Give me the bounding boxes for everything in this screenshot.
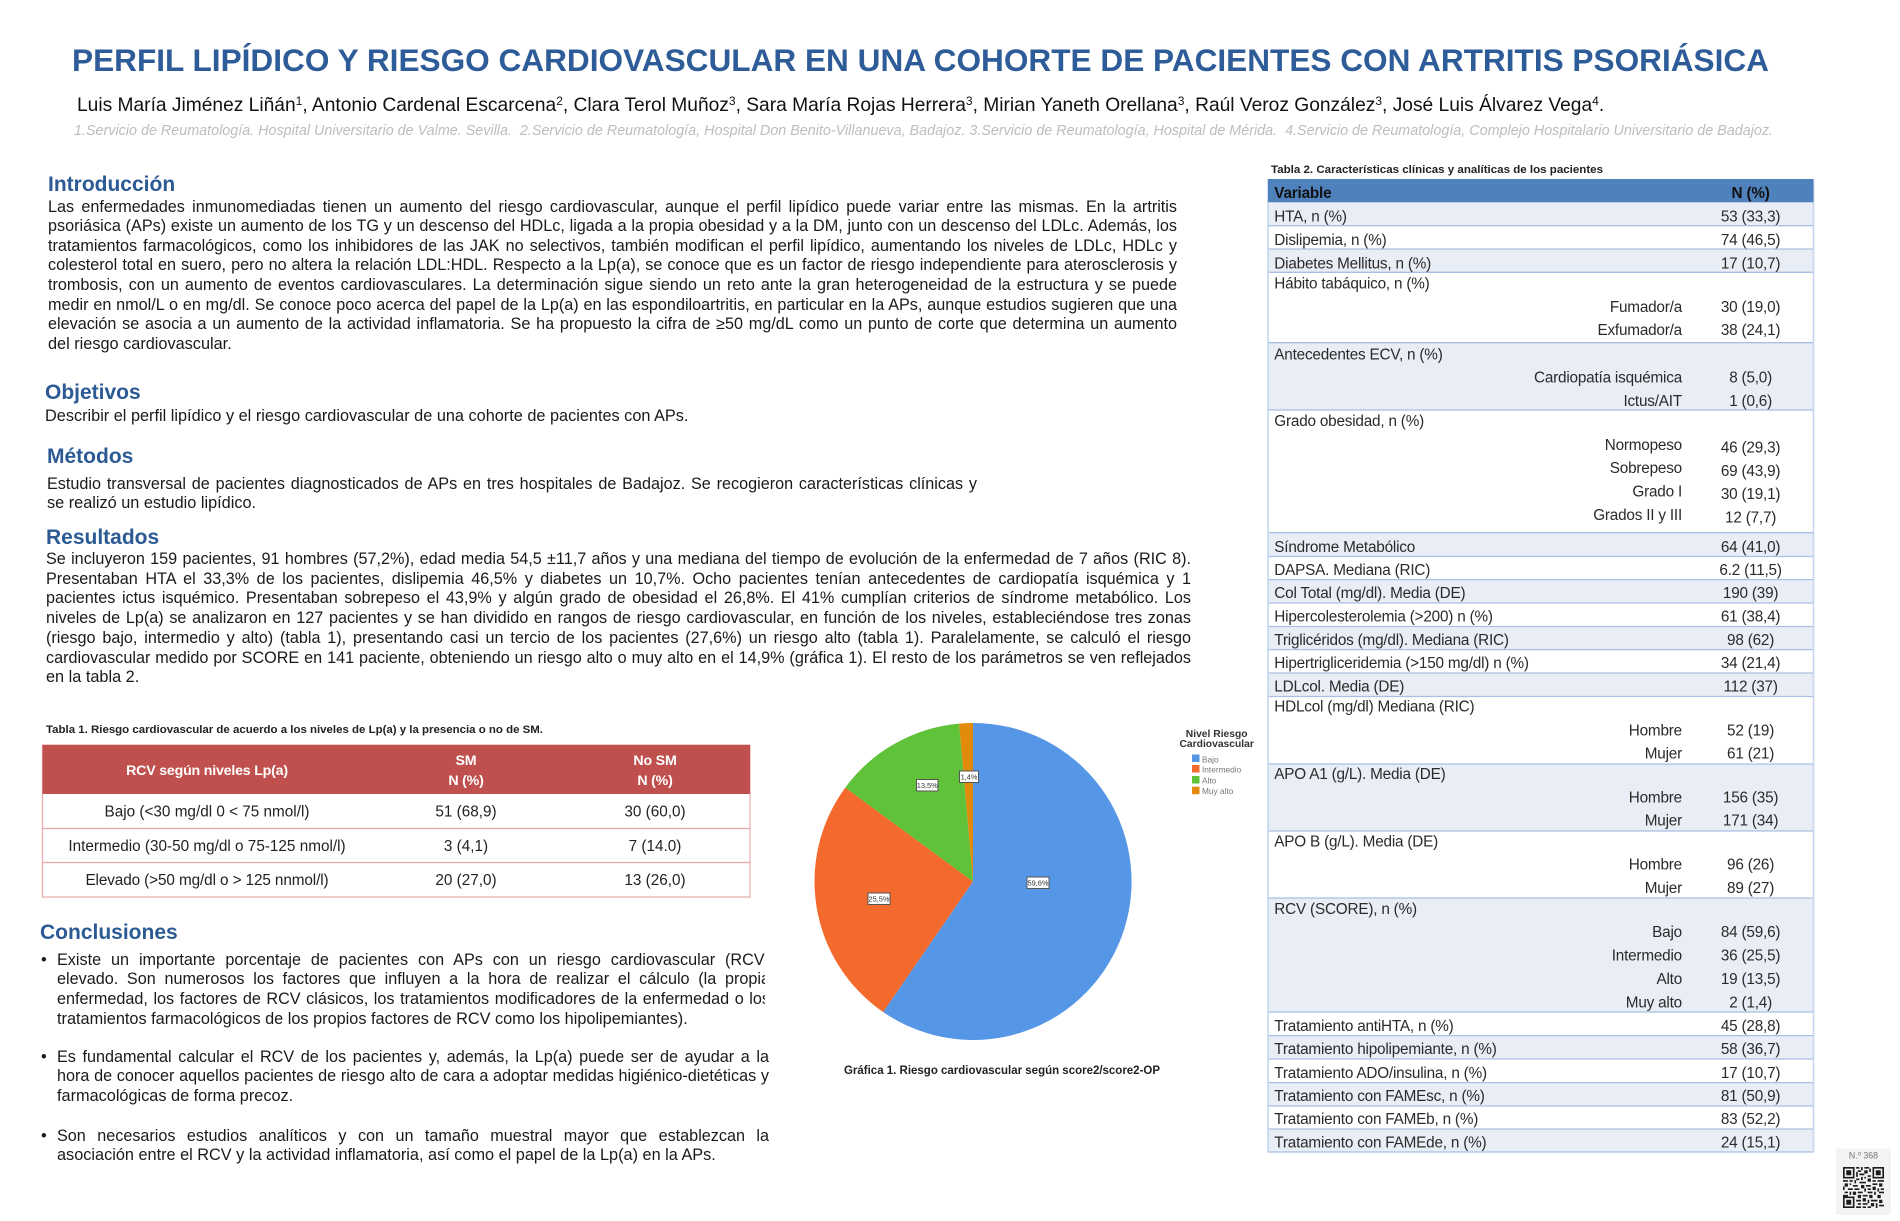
table 2 values: 34 (21,4) <box>1721 655 1780 672</box>
bullet 1: enfermedad, los factores de RCV clásicos, los tratamientos modificadores de la enfermedad o los <box>57 990 765 1008</box>
table 2 left labels: Hipertrigliceridemia (>150 mg/dl) n (%) <box>1274 655 1529 672</box>
table 2 values <box>1719 209 1782 1151</box>
text: results: niveles de Lp(a) se analizaron en 127 pacientes y se han dividido en rangos de riesgo cardiovascular, en función de los niveles, estableciéndose tres zonas <box>46 609 1191 627</box>
table 2 sub-labels: Cardiopatía isquémica <box>1534 370 1683 387</box>
text: introduction: medir en nmol/L o en mg/dl. Se conoce poco acerca del papel de la Lp(a) en las espondiloartritis, en particular en la APs, aunque estudios sugieren que una <box>48 296 1177 314</box>
table 2 values: 38 (24,1) <box>1721 322 1780 339</box>
table 2 sub-labels: Grados II y III <box>1593 507 1682 524</box>
icon: QR code <box>1843 1167 1884 1208</box>
pie caption: Gráfica 1. Riesgo cardiovascular según score2/score2-OP <box>844 1065 1160 1077</box>
table 2 left labels: Grado obesidad, n (%) <box>1274 413 1424 430</box>
text: results: Presentaban HTA el 33,3% de los pacientes, dislipemia 46,5% y diabetes un 10,7%. Ocho pacientes tenían antecedentes de cardiopatía isquémica y 1 <box>46 570 1191 588</box>
text: objectives: Describir el perfil lipídico y el riesgo cardiovascular de una cohorte de pacientes con APs. <box>45 407 688 425</box>
table 2 sub-labels: Sobrepeso <box>1610 460 1682 477</box>
table 2 values: 24 (15,1) <box>1721 1134 1780 1151</box>
table 2 values: 30 (19,0) <box>1721 299 1780 316</box>
label 13,5%: 13,5% <box>917 781 938 790</box>
text: introduction: del riesgo cardiovascular. <box>48 335 232 353</box>
table 1 row: elevado <box>85 872 686 889</box>
table 2 sub-labels: Intermedio <box>1612 947 1682 964</box>
bullet 3: • <box>41 1127 47 1145</box>
table 2 sub-labels: Mujer <box>1645 880 1682 897</box>
table 2 header <box>1268 179 1814 202</box>
section: Métodos <box>47 445 977 512</box>
text: methods: Estudio transversal de pacientes diagnosticados de APs en tres hospitales de Badajoz. Se recogieron características clínicas y <box>47 475 977 493</box>
table 1 row: bajo: 51 (68,9) <box>435 804 497 821</box>
table 2 left labels: Tratamiento hipolipemiante, n (%) <box>1274 1041 1497 1058</box>
table 2 left labels: APO A1 (g/L). Media (DE) <box>1274 766 1446 783</box>
table 2 left labels: LDLcol. Media (DE) <box>1274 679 1404 696</box>
table 2 values: 58 (36,7) <box>1721 1041 1780 1058</box>
text: results: en la tabla 2. <box>46 668 139 686</box>
pie legend: Nivel Riesgo <box>1186 729 1248 740</box>
text: results: cardiovascular medido por SCORE en 141 paciente, obteniendo un riesgo alto o muy alto en el 14,9% (gráfica 1). El resto de los parámetros se ven reflejados <box>46 649 1191 667</box>
table 1 row: bajo: 30 (60,0) <box>624 804 686 821</box>
table 2 header: Variable <box>1274 185 1331 202</box>
table 2 left labels: HDLcol (mg/dl) Mediana (RIC) <box>1274 699 1475 716</box>
pie legend: Intermedio <box>1202 765 1242 775</box>
label 1,4%: 1,4% <box>961 773 978 782</box>
section: Conclusiones <box>40 921 769 1164</box>
pie legend: Muy alto <box>1202 786 1234 796</box>
table 2 sub-labels: Hombre <box>1629 857 1682 874</box>
table 2 sub-labels <box>1534 299 1683 1011</box>
text: introduction: psoriásica (APs) existe un aumento de los TG y un descenso del HDLc, ligada a la propia obesidad y a la DM, junto con un descenso del LDLc. Además, los <box>48 217 1177 235</box>
table 2 values: 190 (39) <box>1723 585 1778 602</box>
text: introduction: colesterol total en suero, pero no altera la relación LDL:HDL. Respecto a la Lp(a), se conoce que es un factor de riesgo independiente para aterosclerosis y <box>48 256 1177 274</box>
table 2 left labels: Síndrome Metabólico <box>1274 539 1415 556</box>
heading: Introducción: Introducción <box>48 172 175 196</box>
table 1 header: SM <box>456 753 476 769</box>
table 1 row: elevado: Elevado (>50 mg/dl o > 125 nnmol/l) <box>85 872 329 889</box>
table 2 values: 81 (50,9) <box>1721 1088 1780 1105</box>
table 2 values: 156 (35) <box>1723 790 1778 807</box>
table 2 sub-labels: Bajo <box>1652 924 1682 941</box>
table 2 left labels: Tratamiento con FAMEde, n (%) <box>1274 1134 1487 1151</box>
table 2 sub-labels: Mujer <box>1645 813 1682 830</box>
table 2 row backgrounds <box>1268 202 1814 1152</box>
bullet 3: Son necesarios estudios analíticos y con un tamaño muestral mayor que establezcan la <box>57 1127 769 1145</box>
bullet 3: asociación entre el RCV y la actividad inflamatoria, así como el papel de la Lp(a) en la APs. <box>57 1146 716 1164</box>
table 2 values: 89 (27) <box>1727 880 1774 897</box>
table 1 row: intermedio: 7 (14.0) <box>629 838 681 855</box>
text: results: pacientes ictus isquémico. Presentaban sobrepeso el 43,9% y algún grado de obesidad el 26,8%. El 41% cumplían criterios de síndrome metabólico. Los <box>46 589 1191 607</box>
table 2 sub-labels: Muy alto <box>1626 994 1682 1011</box>
section: Introducción <box>48 172 1177 353</box>
table 1 row: bajo <box>105 804 686 821</box>
heading: Conclusiones: Conclusiones <box>40 921 178 944</box>
table 1 header: N (%) <box>448 773 484 789</box>
text: results <box>46 550 1191 686</box>
heading: Resultados: Resultados <box>46 526 159 549</box>
table 2 left labels <box>1274 209 1529 1151</box>
table 2 left labels: Hábito tabáquico, n (%) <box>1274 276 1430 293</box>
table 2 sub-labels: Hombre <box>1629 723 1682 740</box>
table 2 values: 61 (21) <box>1727 746 1774 763</box>
table 1 header <box>42 745 750 794</box>
table 2 left labels: Tratamiento con FAMEb, n (%) <box>1274 1111 1478 1128</box>
affiliations: 1.Servicio de Reumatología. Hospital Universitario de Valme. Sevilla. 2.Servicio de Reumatología, Hospital Don Benito-Villanueva, Badajoz. 3.Servicio de Reumatología, Hospital de Mérida. 4.Servicio de Reumatología, Complejo Hospitalario Universitario de Badajoz. <box>74 123 1773 139</box>
table 2 sub-labels: Hombre <box>1629 790 1682 807</box>
table 1 row: intermedio: Intermedio (30-50 mg/dl o 75-125 nmol/l) <box>68 838 346 855</box>
table 2 values: 112 (37) <box>1723 679 1778 696</box>
table 2 sub-labels: Fumador/a <box>1610 299 1683 316</box>
bullet 2 <box>41 1048 769 1105</box>
table 1 row: intermedio <box>68 838 681 855</box>
table 2 values: 61 (38,4) <box>1721 609 1780 626</box>
table 1 row: bajo: Bajo (<30 mg/dl 0 < 75 nmol/l) <box>105 804 309 821</box>
label 59,6%: 59,6% <box>1028 879 1049 888</box>
bullet 2: • <box>41 1048 47 1066</box>
pie legend: Alto <box>1202 775 1217 785</box>
table 2 values: 6.2 (11,5) <box>1719 562 1782 579</box>
table 2 values: 17 (10,7) <box>1721 1065 1780 1082</box>
table 2 left labels: DAPSA. Mediana (RIC) <box>1274 562 1430 579</box>
table 2 left labels: APO B (g/L). Media (DE) <box>1274 834 1438 850</box>
table 2 values: 8 (5,0) <box>1729 370 1772 387</box>
table 2 values: 46 (29,3) <box>1721 440 1780 457</box>
table 1 row: intermedio: 3 (4,1) <box>444 838 488 855</box>
text: introduction: trombosis, con un aumento de eventos cardiovasculares. La determinación sigue siendo un reto ante la gran heterogeneidad de la estructura y se puede <box>48 276 1177 294</box>
poster number and QR code: N.º 368 <box>1849 1150 1878 1160</box>
table 2 values: 64 (41,0) <box>1721 539 1780 556</box>
table 2 values: 96 (26) <box>1727 857 1774 874</box>
section: Objetivos <box>45 381 688 425</box>
pie legend: Cardiovascular <box>1179 739 1254 750</box>
table 2 values: 2 (1,4) <box>1729 994 1772 1011</box>
table 1: RCV according to Lp(a) <box>42 745 750 897</box>
table 2 left labels: RCV (SCORE), n (%) <box>1274 901 1417 918</box>
table 2 left labels: Tratamiento con FAMEsc, n (%) <box>1274 1088 1485 1105</box>
bullet 1 <box>41 951 765 1028</box>
table 1 header: RCV según niveles Lp(a) <box>126 763 288 779</box>
table 1 row: elevado: 20 (27,0) <box>435 872 497 889</box>
table 2 header: N (%) <box>1732 185 1770 202</box>
table 2 left labels: HTA, n (%) <box>1274 209 1347 226</box>
table 2 values: 36 (25,5) <box>1721 947 1780 964</box>
table 2 left labels: Hipercolesterolemia (>200) n (%) <box>1274 609 1493 626</box>
bullet 2: farmacológicas de forma precoz. <box>57 1087 293 1105</box>
table 2 values: 53 (33,3) <box>1721 209 1780 226</box>
table 2 values: 52 (19) <box>1727 723 1774 740</box>
table 2 left labels: Tratamiento antiHTA, n (%) <box>1274 1018 1454 1035</box>
bullet 1: elevado. Son numerosos los factores que influyen a la hora de realizar el cálculo (la propia <box>57 970 765 988</box>
table 2 values: 84 (59,6) <box>1721 924 1780 941</box>
table 1 header: No SM <box>633 753 677 769</box>
text: introduction: tratamientos farmacológicos, como los inhibidores de las JAK no selectivos, también modifican el perfil lipídico, aumentando los niveles de LDLc, HDLc y <box>48 237 1177 255</box>
pie chart: cardiovascular risk <box>815 723 1132 1040</box>
table 2 sub-labels: Normopeso <box>1605 437 1682 454</box>
table 2 left labels: Col Total (mg/dl). Media (DE) <box>1274 585 1466 602</box>
poster number and QR code <box>1836 1148 1891 1215</box>
table 2 sub-labels: Mujer <box>1645 746 1682 763</box>
bullet 1: tratamientos farmacológicos de los propios factores de RCV como los hipolipemiantes). <box>57 1010 688 1028</box>
table 2 caption: Tabla 2. Características clínicas y analíticas de los pacientes <box>1271 164 1603 176</box>
table 2 values: 12 (7,7) <box>1725 510 1776 527</box>
heading: Objetivos: Objetivos <box>45 381 141 404</box>
text: introduction: Las enfermedades inmunomediadas tienen un aumento del riesgo cardiovascular, aunque el perfil lipídico puede variar entre las mismas. En la artritis <box>48 198 1177 216</box>
table 2 sub-labels: Exfumador/a <box>1597 322 1683 339</box>
table 2 values: 1 (0,6) <box>1729 393 1772 410</box>
heading: Métodos: Métodos <box>47 445 133 468</box>
label 25,5%: 25,5% <box>869 895 890 904</box>
table 2 left labels: Diabetes Mellitus, n (%) <box>1274 255 1431 272</box>
table 2 values: 171 (34) <box>1723 813 1778 830</box>
bullet 2: Es fundamental calcular el RCV de los pacientes y, además, la Lp(a) puede ser de ayudar a la <box>57 1048 769 1066</box>
table 2 values: 30 (19,1) <box>1721 486 1780 503</box>
table 2 values: 83 (52,2) <box>1721 1111 1780 1128</box>
text: results: (riesgo bajo, intermedio y alto) (tabla 1), presentando casi un tercio de los pacientes (27,6%) un riesgo alto (tabla 1). Paralelamente, se calculó el riesgo <box>46 629 1191 647</box>
text: introduction <box>48 198 1177 353</box>
table 2 values: 69 (43,9) <box>1721 463 1780 480</box>
pie legend: Bajo <box>1202 754 1219 764</box>
table 2 sub-labels: Alto <box>1656 971 1682 988</box>
authors: Luis María Jiménez Liñán1, Antonio Cardenal Escarcena2, Clara Terol Muñoz3, Sara María Rojas Herrera3, Mirian Yaneth Orellana3, Raúl Veroz González3, José Luis Álvarez Vega4. <box>77 94 1604 116</box>
table 2 left labels: Triglicéridos (mg/dl). Mediana (RIC) <box>1274 632 1509 649</box>
table 1 header: N (%) <box>637 773 673 789</box>
table 2 values: 17 (10,7) <box>1721 255 1780 272</box>
text: introduction: elevación se asocia a un aumento de la actividad inflamatoria. Se ha propuesto la cifra de ≥50 mg/dL como un punto de corte que determina un aumento <box>48 315 1177 333</box>
bullet 1: • <box>41 951 47 969</box>
table 2 values: 74 (46,5) <box>1721 232 1780 249</box>
table 2 sub-labels: Grado I <box>1632 484 1682 501</box>
table 2 values: 98 (62) <box>1727 632 1774 649</box>
bullet 3 <box>41 1127 769 1164</box>
table 2 left labels: Antecedentes ECV, n (%) <box>1274 346 1443 363</box>
label 1,4% <box>960 771 978 782</box>
table 2 sub-labels: Ictus/AIT <box>1623 393 1682 410</box>
table 2 left labels: Tratamiento ADO/insulina, n (%) <box>1274 1065 1487 1082</box>
table 2 left labels: Dislipemia, n (%) <box>1274 232 1387 249</box>
text: methods: se realizó un estudio lipídico. <box>47 494 256 512</box>
table 2 values: 19 (13,5) <box>1721 971 1780 988</box>
text: results: Se incluyeron 159 pacientes, 91 hombres (57,2%), edad media 54,5 ±11,7 años y una mediana del tiempo de evolución de la enfermedad de 7 años (RIC 8). <box>46 550 1191 568</box>
title: PERFIL LIPÍDICO Y RIESGO CARDIOVASCULAR EN UNA COHORTE DE PACIENTES CON ARTRITIS PSORIÁSICA <box>72 42 1769 78</box>
pie legend <box>1179 729 1254 796</box>
table 1 row: elevado: 13 (26,0) <box>624 872 686 889</box>
text: methods <box>47 475 977 512</box>
bullet 2: hora de conocer aquellos pacientes de riesgo alto de cara a adoptar medidas higiénico-dietéticas y <box>57 1067 769 1085</box>
table 2: clinical and analytical characteristics <box>1268 179 1814 1152</box>
bullet 1: Existe un importante porcentaje de pacientes con APs con un riesgo cardiovascular (RCV) <box>57 951 765 969</box>
table 2 values: 45 (28,8) <box>1721 1018 1780 1035</box>
table 1 caption: Tabla 1. Riesgo cardiovascular de acuerdo a los niveles de Lp(a) y la presencia o no de SM. <box>46 724 543 736</box>
section: Resultados <box>46 526 1191 686</box>
